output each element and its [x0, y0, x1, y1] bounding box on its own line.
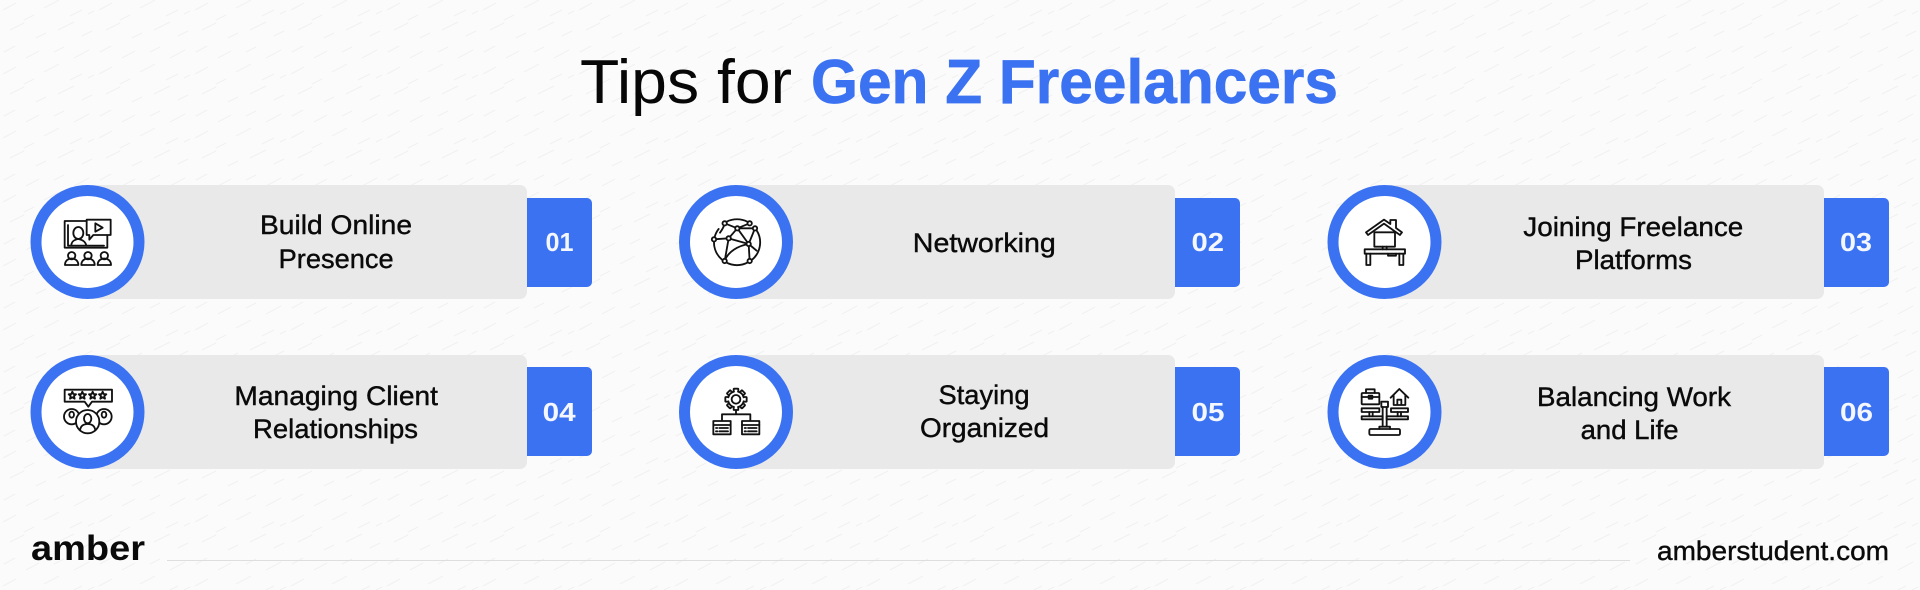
label: Balancing Work — [1537, 382, 1732, 412]
number badge text: 04 — [543, 397, 576, 427]
number badge text: 05 — [1192, 397, 1224, 427]
label — [920, 380, 1049, 443]
card 05: Staying Organized — [684, 355, 1240, 469]
label — [260, 210, 412, 274]
icon: work life balance scale — [1362, 389, 1408, 435]
label: Build Online — [260, 210, 412, 240]
card 02: Networking — [684, 185, 1240, 299]
label — [1537, 382, 1732, 445]
icon: network globe — [712, 219, 760, 265]
label: Platforms — [1575, 245, 1692, 275]
number badge text: 03 — [1840, 227, 1872, 257]
label: Managing Client — [234, 381, 439, 411]
label: Networking — [913, 228, 1056, 258]
label: Presence — [279, 244, 394, 274]
footer logo: amber — [31, 529, 145, 568]
label: Organized — [920, 413, 1049, 443]
card 06: Balancing Work and Life — [1333, 355, 1889, 469]
label: Staying — [938, 380, 1030, 410]
number badge text: 01 — [546, 227, 574, 257]
icon: client ratings — [64, 390, 112, 433]
number badge text: 06 — [1840, 397, 1873, 427]
title — [580, 48, 1338, 117]
number badge text: 02 — [1192, 227, 1224, 257]
icon: home desk — [1365, 220, 1405, 265]
title: Gen Z Freelancers — [811, 48, 1338, 117]
card 01: Build Online Presence — [36, 185, 592, 299]
label: and Life — [1581, 415, 1679, 445]
icon: online presentation — [65, 220, 111, 265]
label: Joining Freelance — [1523, 212, 1743, 242]
icon: gear and organization chart — [713, 389, 759, 434]
title: Tips for — [580, 48, 792, 117]
label — [1523, 212, 1743, 275]
label: Relationships — [253, 414, 418, 444]
card 04: Managing Client Relationships — [36, 355, 592, 469]
footer website: amberstudent.com — [1657, 536, 1889, 566]
label — [234, 381, 439, 444]
card 03: Joining Freelance Platforms — [1333, 185, 1889, 299]
